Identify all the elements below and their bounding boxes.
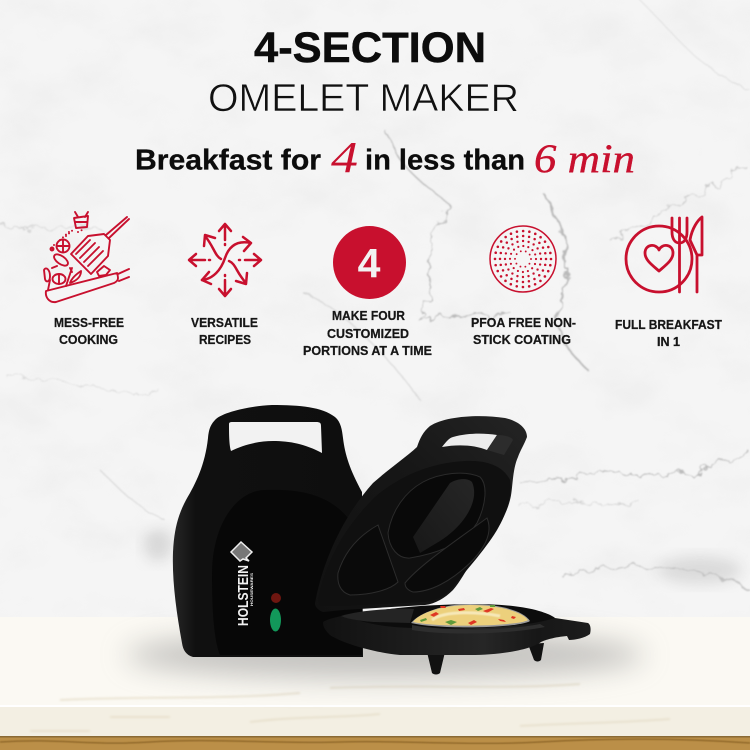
tagline [135, 133, 635, 182]
tagline: in less than [365, 144, 525, 176]
title [208, 24, 519, 120]
label: PFOA FREE NON- [471, 316, 576, 330]
feature: non-stick coating [471, 226, 576, 347]
feature: versatile recipes: RECIPES [199, 333, 251, 347]
wood base strip [0, 736, 750, 750]
feature: mess-free cooking: COOKING [59, 333, 118, 347]
brand logo: HOLSTEIN [235, 565, 252, 626]
omelet [411, 604, 530, 627]
feature: four portions [303, 226, 432, 358]
icon: number 4 badge: 4 [358, 240, 381, 286]
marble countertop [0, 617, 750, 736]
feature: four portions: CUSTOMIZED [327, 327, 409, 341]
lid compartments [338, 473, 489, 595]
icon: pan with spatula and food [44, 212, 129, 302]
title: 4-SECTION [254, 24, 486, 72]
brand logo: HOUSEWARES [249, 573, 254, 606]
table shadow [125, 631, 645, 679]
icon: plate with heart and cutlery [626, 217, 702, 292]
open lid [315, 416, 527, 612]
label: MAKE FOUR [332, 309, 405, 323]
label: VERSATILE [191, 316, 258, 330]
feature: mess-free cooking [44, 212, 129, 347]
feature: four portions: PORTIONS AT A TIME [303, 344, 432, 358]
label: FULL BREAKFAST [615, 318, 722, 332]
product: closed omelet maker [173, 405, 363, 657]
label: MESS-FREE [54, 316, 124, 330]
feature: full breakfast: IN 1 [657, 335, 680, 349]
tagline: Breakfast for [135, 144, 321, 176]
brand logo [231, 542, 254, 626]
product: open omelet maker [315, 416, 591, 674]
feature: non-stick coating: STICK COATING [473, 333, 571, 347]
lower plate and base [323, 604, 591, 674]
icon: multidirectional arrows [189, 224, 261, 296]
title: OMELET MAKER [208, 77, 519, 120]
handle opening [442, 434, 497, 450]
feature: full breakfast [615, 217, 722, 349]
icon: dotted pan surface [490, 226, 556, 292]
feature: versatile recipes [189, 224, 261, 347]
indicator lights [270, 593, 281, 632]
tagline: 4 [331, 133, 358, 182]
tagline: 6 min [534, 136, 635, 181]
handle opening [229, 422, 322, 453]
